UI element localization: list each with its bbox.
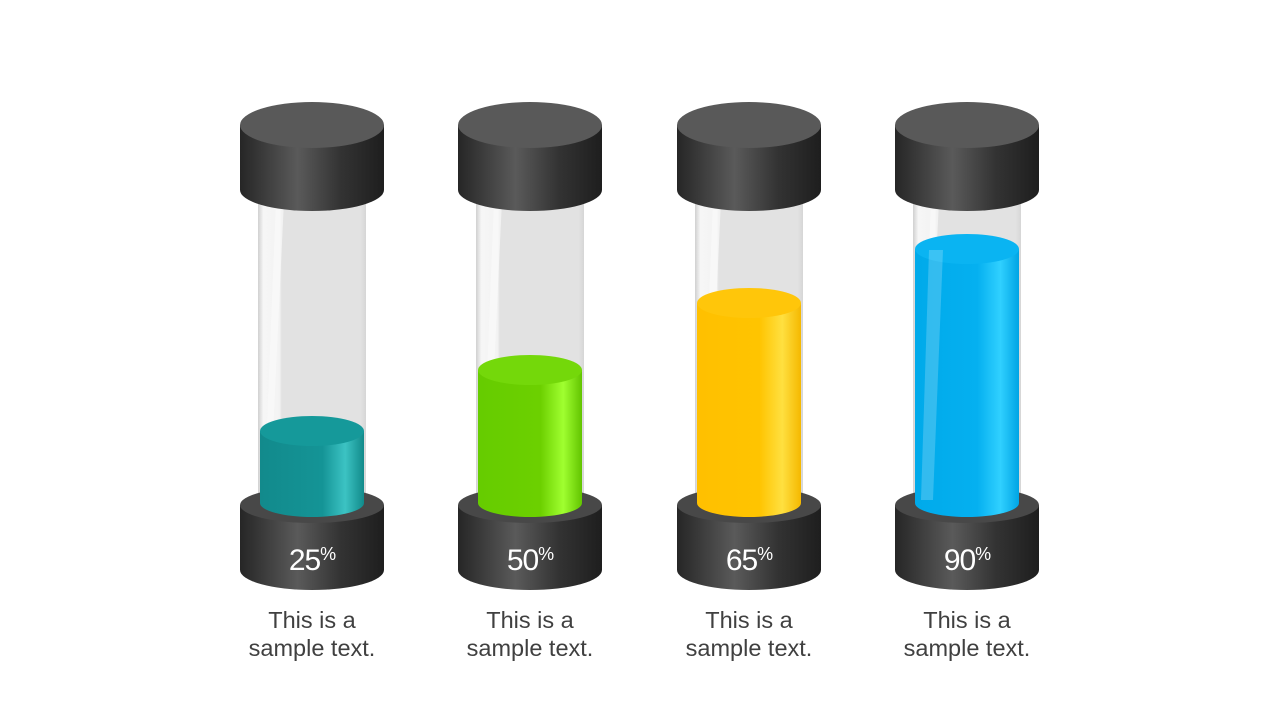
value 65%: % bbox=[757, 544, 773, 564]
value 90%: 90 bbox=[944, 544, 975, 577]
label 3: This is a bbox=[705, 607, 793, 633]
liquid: teal bbox=[260, 416, 364, 517]
tube 4: 90% bbox=[895, 102, 1039, 590]
liquid: green bbox=[478, 355, 582, 517]
label 4: sample text. bbox=[904, 635, 1030, 661]
value 50%: 50 bbox=[507, 544, 538, 577]
label 4: This is a bbox=[923, 607, 1011, 633]
label 2: sample text. bbox=[467, 635, 593, 661]
label 1: This is a bbox=[268, 607, 356, 633]
value 25%: 25 bbox=[289, 544, 320, 577]
label 2: This is a bbox=[486, 607, 574, 633]
liquid: yellow bbox=[697, 288, 801, 517]
value 90%: % bbox=[975, 544, 991, 564]
tube 2: 50% bbox=[458, 102, 602, 590]
label 1: sample text. bbox=[249, 635, 375, 661]
tube 3: 65% bbox=[677, 102, 821, 590]
value 50%: % bbox=[538, 544, 554, 564]
label 3: sample text. bbox=[686, 635, 812, 661]
tube 1: 25% bbox=[240, 102, 384, 590]
liquid: blue bbox=[915, 234, 1019, 517]
value 65%: 65 bbox=[726, 544, 757, 577]
value 25%: % bbox=[320, 544, 336, 564]
